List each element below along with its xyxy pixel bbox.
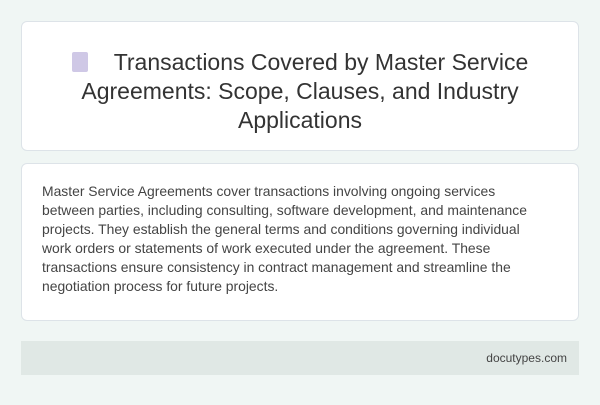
title: Transactions Covered by Master Service bbox=[114, 49, 528, 75]
description text bbox=[42, 183, 527, 294]
description text: projects. They establish the general terms and conditions governing individual bbox=[42, 221, 520, 237]
footer bbox=[21, 341, 579, 375]
description card bbox=[21, 163, 579, 321]
title: Agreements: Scope, Clauses, and Industry bbox=[81, 78, 519, 104]
description text: between parties, including consulting, software development, and maintenance bbox=[42, 202, 527, 218]
footer: docutypes.com bbox=[486, 351, 567, 365]
description text: work orders or statements of work executed under the agreement. These bbox=[42, 240, 490, 256]
title card bbox=[21, 21, 579, 151]
description text: transactions ensure consistency in contract management and streamline the bbox=[42, 259, 511, 275]
description text: negotiation process for future projects. bbox=[42, 278, 278, 294]
title bbox=[72, 49, 528, 133]
description text: Master Service Agreements cover transactions involving ongoing services bbox=[42, 183, 495, 199]
title: Applications bbox=[238, 107, 362, 133]
